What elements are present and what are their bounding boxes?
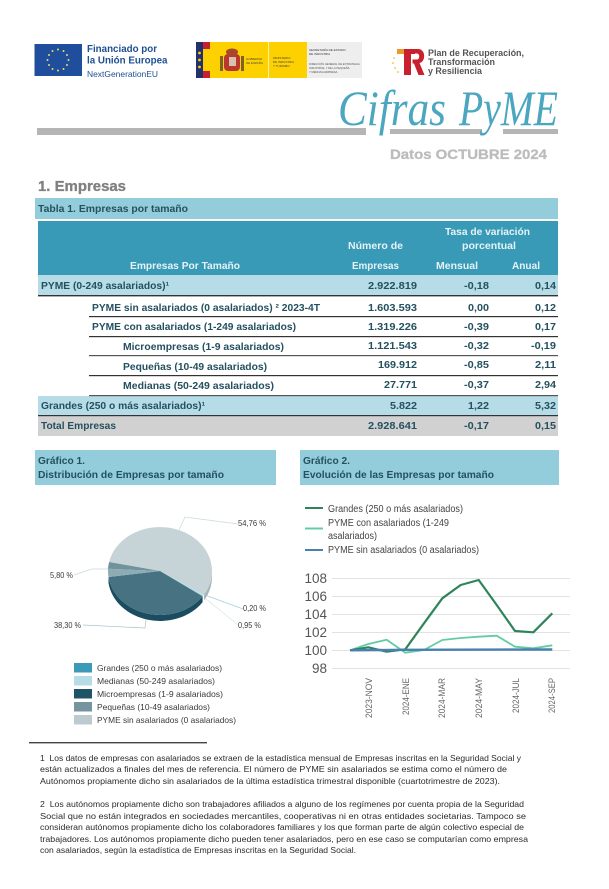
table header: porcentual	[462, 240, 516, 252]
row: Pequeñas: Pequeñas (10-49 asalariados)	[123, 361, 267, 373]
logo: Gobierno de España: DE ESPAÑA	[246, 60, 263, 65]
footnote 1	[40, 753, 522, 786]
logo: Gobierno de España: INDUSTRIAL Y DE LA PEQUEÑA	[309, 65, 350, 70]
row: Grandes	[41, 400, 556, 412]
row: PYME sin asalariados: 0,00	[468, 302, 489, 314]
row: Pequeñas: -0,85	[464, 359, 489, 371]
chart 1 heading: Gráfico 1.	[38, 455, 85, 467]
logo: Gobierno de España: DE INDUSTRIA	[273, 60, 294, 64]
y axis labels: 98	[312, 661, 327, 676]
row: PYME con asalariados: PYME con asalariados (1-249 asalariados)	[92, 321, 296, 333]
line chart: evolution	[304, 571, 570, 718]
row: Microempresas: 1.121.543	[368, 340, 417, 352]
pie chart: distribution: 0,95 %	[238, 620, 261, 630]
logo: Gobierno de España	[196, 42, 362, 78]
table 1: empresas por tamaño	[38, 221, 558, 436]
row: Medianas: -0,37	[464, 379, 489, 391]
pie side: dark	[108, 577, 203, 621]
y axis labels	[304, 571, 327, 676]
row: Total Empresas: -0,17	[464, 420, 489, 432]
pie legend	[74, 663, 236, 725]
row: PYME: 0,14	[535, 280, 556, 292]
table title bar: Tabla 1. Empresas por tamaño	[38, 203, 188, 215]
row: PYME: -0,18	[464, 280, 489, 292]
pie legend: Medianas (50-249 asalariados)	[97, 676, 215, 686]
row: Microempresas	[123, 340, 556, 353]
row: Pequeñas: 2,11	[535, 359, 556, 371]
row: PYME sin asalariados: 1.603.593	[368, 302, 417, 314]
logo: Financiado por la Unión Europea: Financiado por	[87, 44, 157, 55]
row: Total Empresas: 2.928.641	[368, 420, 417, 432]
chart 1 heading	[35, 450, 276, 485]
row: Microempresas: -0,32	[464, 340, 489, 352]
row: Total Empresas	[41, 420, 556, 432]
x axis labels: 2023-NOV	[364, 677, 375, 718]
row: PYME con asalariados: 0,17	[535, 321, 556, 333]
logo: Plan de Recuperación: Transformación	[428, 57, 495, 67]
footnote 1: están actualizados a finales del mes de referencia. El número de PYME sin asalariados se estima como el número de	[40, 764, 507, 774]
x axis labels	[364, 677, 558, 718]
chart 2 heading	[300, 450, 559, 485]
y axis labels: 108	[304, 571, 327, 586]
footnote 2: con asalariados, según la estadística de Empresas inscritas en la Seguridad Social.	[40, 845, 356, 855]
row: Grandes: Grandes (250 o más asalariados)¹	[41, 400, 205, 412]
footnote 2: 2 Los autónomos propiamente dicho son trabajadores afiliados a alguno de los regímenes por cuenta propia de la Seguridad	[40, 799, 524, 809]
series: PYME con asalariados	[350, 636, 552, 653]
pie chart: distribution	[50, 517, 267, 630]
y axis labels: 104	[304, 607, 327, 622]
line chart legend: PYME sin asalariados (0 asalariados)	[328, 545, 479, 556]
pie legend: Microempresas (1-9 asalariados)	[97, 689, 223, 699]
row: PYME: 2.922.819	[368, 280, 417, 292]
chart 2 heading: Evolución de las Empresas por tamaño	[303, 469, 494, 481]
logo: Gobierno de España: MINISTERIO	[273, 56, 291, 60]
heading: 1. Empresas: 1. Empresas	[38, 179, 126, 195]
x axis labels: 2024-MAY	[474, 677, 485, 718]
table header: Empresas Por Tamaño	[130, 260, 240, 272]
footnote divider	[29, 742, 207, 743]
x axis labels: 2024-ENE	[401, 678, 412, 715]
logo: Gobierno de España: GOBIERNO	[246, 57, 263, 61]
logo: Plan de Recuperación	[392, 48, 524, 76]
logo: Plan de Recuperación: Plan de Recuperación,	[428, 48, 524, 58]
logo: Plan de Recuperación: y Resiliencia	[428, 66, 483, 76]
row: Microempresas: Microempresas (1-9 asalariados)	[123, 341, 284, 353]
logo: Gobierno de España: DE INDUSTRIA	[309, 52, 330, 56]
footnote 2: Social que no están integrados en sociedades mercantiles, cooperativas ni en otras entidades societarias. Tampoco se	[40, 811, 526, 821]
line chart legend: Grandes (250 o más asalariados)	[328, 504, 463, 515]
pie chart: distribution: 5,80 %	[50, 570, 73, 580]
pie side: light	[204, 571, 212, 600]
line chart legend	[305, 504, 479, 556]
table header: Tasa de variación	[445, 226, 530, 238]
row: PYME con asalariados	[92, 321, 556, 333]
row: Grandes: 5,32	[535, 400, 556, 412]
logo: Financiado por la Unión Europea: la Unión Europea	[87, 56, 168, 66]
logo: Gobierno de España: DIRECCIÓN GENERAL DE ESTRATEGIA	[309, 61, 360, 66]
row: Pequeñas	[123, 359, 556, 373]
line chart legend: asalariados)	[328, 531, 377, 542]
leader lines	[74, 517, 243, 628]
row: PYME sin asalariados	[92, 302, 556, 314]
slice: Grandes and Medianas	[160, 571, 204, 596]
table header: Empresas	[352, 260, 399, 272]
row: PYME con asalariados: -0,39	[464, 321, 489, 333]
row: PYME: PYME (0-249 asalariados)¹	[41, 280, 169, 292]
logo: Gobierno de España: SECRETARÍA DE ESTADO	[309, 48, 346, 52]
row: PYME sin asalariados: 0,12	[535, 302, 556, 314]
row: Grandes: 1,22	[468, 400, 489, 412]
row: Medianas: 2,94	[535, 379, 556, 391]
row: PYME sin asalariados: PYME sin asalariados (0 asalariados) ² 2023-4T	[92, 302, 321, 314]
x axis labels: 2024-JUL	[511, 678, 522, 713]
logo: Financiado por la Unión Europea	[34, 44, 168, 79]
footnote 1: 1 Los datos de empresas con asalariados se extraen de la estadística mensual de Empresas inscritas en la Seguridad Social y	[40, 753, 522, 763]
chart 2 heading: Gráfico 2.	[303, 455, 350, 467]
title band: grey bars	[37, 128, 558, 135]
row: Total Empresas: 0,15	[535, 420, 556, 432]
table header: Anual	[512, 260, 540, 272]
logo: Gobierno de España: Y MEDIANA EMPRESA	[309, 70, 338, 74]
subtitle: Datos Octubre 2024: Datos OCTUBRE 2024	[390, 147, 548, 162]
title: Cifras PyME	[338, 80, 558, 136]
footnote 2: consideran autónomos propiamente dicho los colaboradores familiares y los que forman parte de algún colectivo especial de	[40, 822, 524, 832]
pie chart: distribution: 38,30 %	[54, 620, 81, 630]
title: Cifras PyME: Cifras	[338, 80, 446, 136]
row: Medianas	[123, 379, 556, 392]
x axis labels: 2024-SEP	[547, 678, 558, 713]
pie legend: PYME sin asalariados (0 asalariados)	[97, 715, 236, 725]
pie legend: Pequeñas (10-49 asalariados)	[97, 702, 210, 712]
line chart legend: PYME con asalariados (1-249	[328, 518, 449, 529]
table title bar	[35, 198, 558, 219]
series: PYME sin asalariados	[350, 648, 552, 651]
row: Grandes: 5.822	[390, 400, 417, 412]
slice: PYME sin asalariados	[109, 527, 212, 594]
slice: Microempresas	[108, 571, 203, 615]
row: Microempresas: -0,19	[531, 340, 556, 352]
row: Medianas: 27.771	[384, 379, 417, 391]
title: Cifras PyME: PyME	[458, 80, 558, 136]
x axis labels: 2024-MAR	[437, 678, 448, 718]
table header: Número de	[348, 240, 403, 252]
y axis labels: 100	[304, 643, 327, 658]
logo: Gobierno de España: Y TURISMO	[273, 64, 290, 68]
row: Pequeñas: 169.912	[378, 359, 417, 371]
table header: Mensual	[436, 260, 478, 272]
row: Total Empresas: Total Empresas	[41, 420, 116, 432]
series: Grandes	[350, 580, 552, 652]
row: PYME con asalariados: 1.319.226	[368, 321, 417, 333]
footnote 2: trabajadores. Los autónomos propiamente dicho pueden tener asalariados, pero en ese caso se computarían como empresa	[40, 834, 528, 844]
pie chart: distribution: 0,20 %	[243, 603, 266, 613]
table header	[38, 221, 558, 275]
row: PYME	[41, 280, 556, 292]
y axis labels: 106	[304, 589, 327, 604]
chart 1 heading: Distribución de Empresas por tamaño	[38, 469, 224, 481]
logo: Financiado por la Unión Europea: NextGenerationEU	[87, 69, 158, 79]
footnote 2	[40, 799, 528, 855]
pie legend: Grandes (250 o más asalariados)	[97, 663, 222, 673]
slice: Pequeñas	[108, 569, 160, 577]
pie labels: 54,76 %	[238, 518, 267, 528]
row: Medianas: Medianas (50-249 asalariados)	[123, 380, 274, 392]
footnote 1: Autónomos propiamente dicho sin asalariados de la última estadística trimestral disponible (cuartotrimestre de 2023).	[40, 776, 500, 786]
y axis labels: 102	[304, 625, 327, 640]
